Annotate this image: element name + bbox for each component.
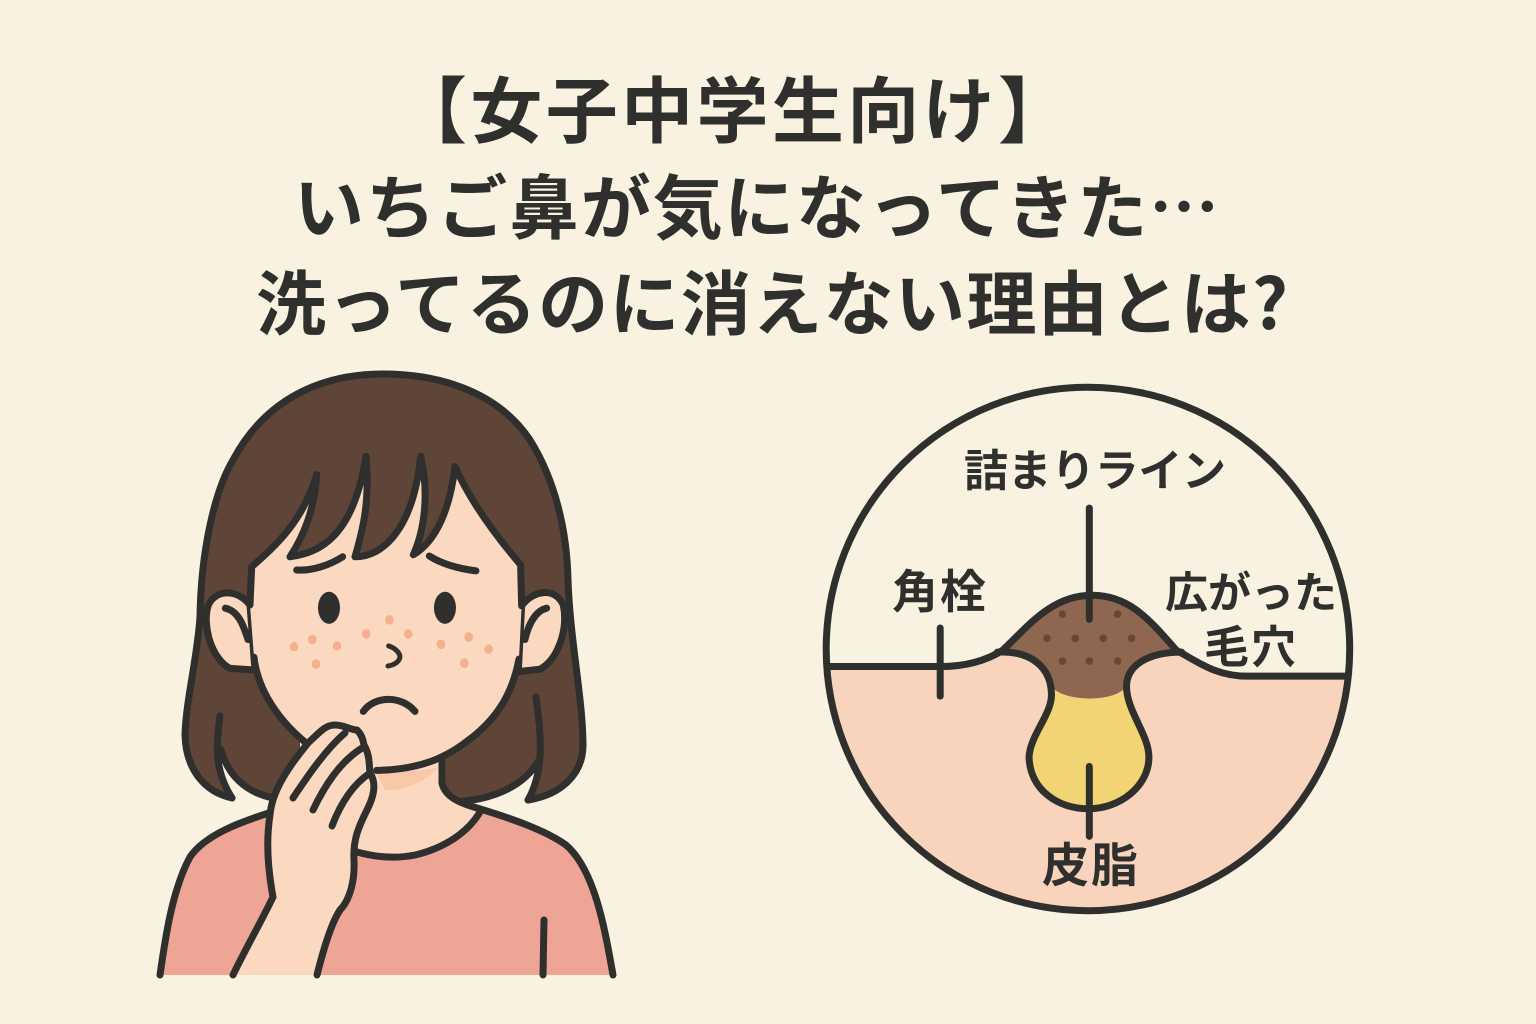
bangs and hairline [250, 456, 522, 606]
mouth [363, 699, 415, 711]
hand [233, 725, 374, 975]
labels: 毛穴 [1204, 611, 1296, 676]
freckles [290, 615, 493, 669]
title: 洗ってるのに消えない理由とは? [256, 249, 1288, 350]
clogged plug [997, 595, 1178, 699]
skin surface outline [828, 595, 1345, 676]
head [206, 456, 565, 770]
neck shadow [377, 768, 437, 790]
nose [388, 646, 400, 666]
plug dots [1043, 610, 1135, 665]
hair outline [185, 374, 583, 800]
labels: 角栓 [892, 556, 986, 622]
labels: 皮脂 [1042, 827, 1138, 896]
title [256, 53, 1288, 350]
labels [892, 435, 1337, 896]
labels: 広がった [1165, 559, 1337, 621]
ear inner lines [225, 608, 547, 640]
face [250, 456, 522, 770]
shirt [160, 808, 613, 975]
shirt outline [160, 808, 613, 975]
fingers [293, 733, 370, 826]
leader lines [940, 508, 1089, 836]
jaw lines [254, 657, 519, 770]
hair [185, 374, 583, 802]
sebum [1029, 688, 1149, 809]
title: いちご鼻が気になってきた… [294, 153, 1219, 254]
circle outline [826, 387, 1350, 911]
title: 【女子中学生向け】 [395, 53, 1070, 158]
ears [206, 593, 255, 670]
sleeve fold [543, 920, 544, 975]
neck [350, 755, 480, 858]
pore outline [997, 652, 1182, 809]
diagram: pore cross-section [820, 387, 1360, 920]
eyes [318, 592, 456, 624]
neck lines [357, 762, 480, 857]
labels: 詰まりライン [964, 435, 1226, 499]
eyebrows [297, 556, 476, 571]
illustration: worried girl [160, 374, 613, 975]
hair locks [217, 697, 540, 802]
skin layer [830, 656, 1344, 908]
